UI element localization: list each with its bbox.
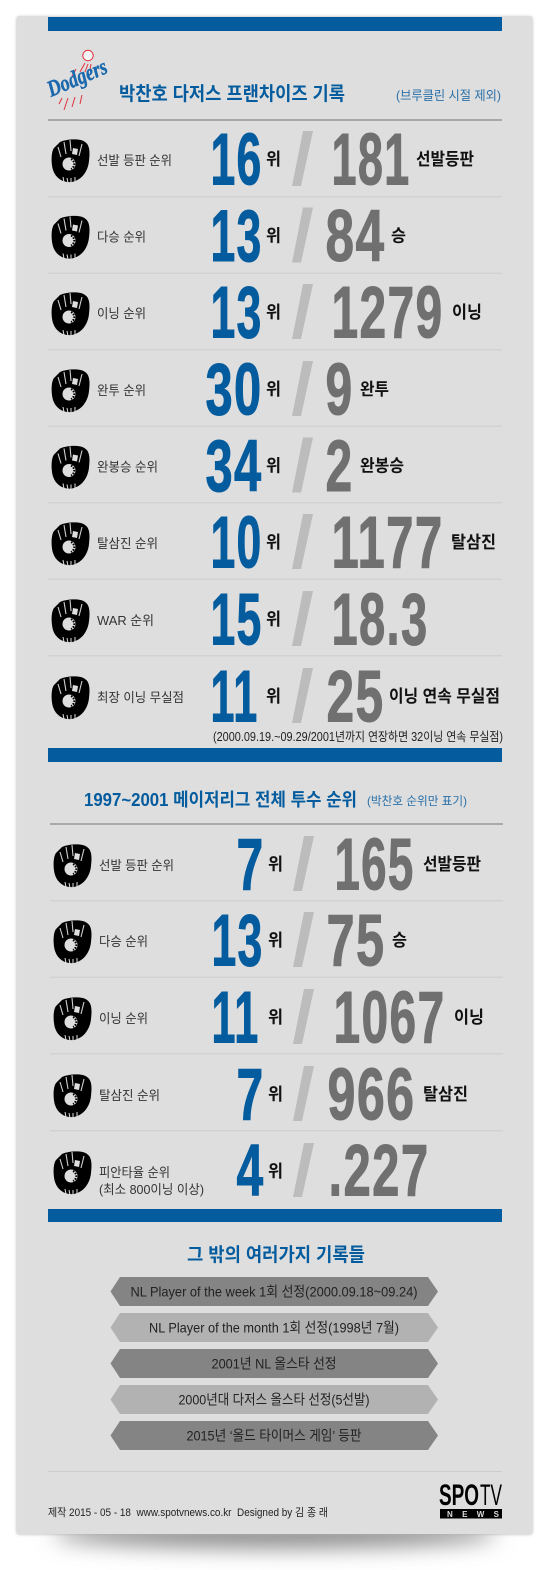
row: innings: 이닝: [452, 303, 482, 322]
middle blue bar: [48, 748, 502, 762]
ribbon: 2001 all-star: [110, 1349, 438, 1378]
ribbon: player of the month: NL Player of the month 1회 선정(1998년 7월): [149, 1320, 399, 1336]
row: starts 1997-2001: 165: [334, 824, 414, 906]
ribbon: old timers game: 2015년 ‘올드 타이머스 게임’ 등판: [186, 1428, 362, 1444]
row: innings: [52, 272, 482, 354]
row: opponent batting average: 4: [236, 1130, 264, 1212]
row: innings 1997-2001: 1067: [334, 978, 446, 1058]
row: innings: 13: [210, 272, 262, 354]
row: wins: 다승 순위: [97, 230, 146, 244]
row: scoreless innings: 위: [266, 687, 281, 706]
row: complete games: 완투 순위: [97, 383, 146, 398]
row: strikeouts: 1177: [332, 502, 444, 584]
ribbon: player of the week: NL Player of the week 1회 선정(2000.09.18~09.24): [130, 1284, 418, 1300]
row: complete games: 위: [266, 380, 281, 399]
row: wins 1997-2001: 위: [268, 931, 283, 950]
row: strikeouts 1997-2001: [54, 1054, 468, 1136]
row: wins 1997-2001: 75: [326, 900, 386, 982]
row: wins 1997-2001: 13: [212, 900, 264, 982]
row: starts: [52, 120, 474, 200]
heading: MLB pitcher rankings 1997-2001: 1997~2001 메이저리그 전체 투수 순위: [84, 790, 357, 810]
row: wins 1997-2001: 승: [392, 931, 407, 950]
row: complete games: [52, 350, 389, 430]
row: complete games: 30: [206, 350, 262, 430]
row: strikeouts 1997-2001: 966: [328, 1054, 416, 1136]
row: strikeouts: 탈삼진 순위: [97, 536, 158, 551]
row: shutouts: 위: [266, 456, 281, 476]
row: WAR: WAR 순위: [97, 613, 154, 628]
row: complete games: 완투: [360, 380, 389, 399]
row: strikeouts: [52, 502, 496, 584]
row: innings: 1279: [332, 272, 444, 354]
row: starts 1997-2001: 선발등판: [423, 855, 481, 874]
row: starts: 선발 등판 순위: [97, 153, 172, 168]
ribbon: 2000s Dodgers all-star: 2000년대 다저스 올스타 선정(5선발): [178, 1392, 370, 1408]
row: scoreless innings: 25: [326, 656, 384, 738]
row: opponent batting average: [54, 1130, 429, 1212]
row: scoreless innings: 최장 이닝 무실점: [97, 690, 184, 705]
row: strikeouts 1997-2001: 탈삼진: [423, 1085, 468, 1104]
row: strikeouts 1997-2001: 탈삼진 순위: [99, 1088, 160, 1103]
row: opponent batting average: 위: [268, 1162, 283, 1181]
row: wins: 13: [210, 196, 262, 277]
row: opponent batting average: (최소 800이닝 이상): [99, 1182, 204, 1197]
ribbon: player of the week: [110, 1277, 438, 1306]
row: starts: 181: [332, 120, 410, 200]
row: WAR: [52, 580, 428, 660]
row: scoreless innings: [52, 656, 500, 738]
row: WAR: 위: [266, 610, 281, 629]
title: franchise records: 박찬호 다저스 프랜차이즈 기록: [119, 83, 345, 105]
row: WAR: 18.3: [332, 580, 428, 660]
row: starts: 위: [266, 150, 281, 169]
row: strikeouts 1997-2001: 위: [268, 1085, 283, 1104]
row: scoreless innings: 이닝 연속 무실점: [389, 687, 500, 706]
row: shutouts: 완봉승 순위: [97, 460, 158, 474]
row: innings 1997-2001: 위: [268, 1008, 283, 1027]
row: starts: 선발등판: [416, 150, 474, 169]
row: opponent batting average: .227: [328, 1130, 430, 1212]
row: opponent batting average: 피안타율 순위: [99, 1165, 170, 1180]
icon: Dodgers logo: Dodgers: [42, 54, 111, 102]
row: shutouts: 34: [206, 426, 262, 507]
row: innings 1997-2001: [54, 978, 484, 1058]
ribbon: old timers game: [110, 1421, 438, 1450]
note: scoreless streak dates: (2000.09.19.~09.29/2001년까지 연장하면 32이닝 연속 무실점): [213, 730, 503, 744]
row: wins: 위: [266, 226, 281, 246]
row: innings 1997-2001: 이닝: [454, 1008, 484, 1027]
note: excluding Brooklyn: (브루클린 시절 제외): [396, 88, 501, 103]
row: strikeouts: 탈삼진: [451, 533, 496, 552]
row: innings: 이닝 순위: [97, 306, 146, 321]
ribbon: 2000s Dodgers all-star: [110, 1385, 438, 1414]
row: wins 1997-2001: [54, 900, 407, 982]
row: wins: 승: [391, 226, 406, 246]
note: only Park's ranks shown: (박찬호 순위만 표기): [367, 793, 467, 808]
row: starts 1997-2001: [54, 824, 481, 906]
row: starts: 16: [210, 120, 262, 200]
row: complete games: 9: [326, 350, 354, 430]
ribbon: 2001 all-star: 2001년 NL 올스타 선정: [212, 1356, 336, 1372]
row: starts 1997-2001: 위: [268, 855, 283, 874]
row: strikeouts 1997-2001: 7: [236, 1054, 264, 1136]
row: wins: [52, 196, 406, 277]
row: starts 1997-2001: 선발 등판 순위: [99, 858, 174, 873]
top blue bar: [48, 17, 502, 31]
lower blue bar: [48, 1209, 502, 1222]
row: shutouts: 2: [326, 426, 354, 507]
logo: SPOTV NEWS: NEWS: [447, 1510, 500, 1519]
footer credits: 제작 2015 - 05 - 18 www.spotvnews.co.kr Designed by 김 종 래: [48, 1506, 328, 1519]
row: wins 1997-2001: 다승 순위: [99, 934, 148, 949]
row: shutouts: 완봉승: [360, 456, 404, 476]
row: WAR: 15: [210, 580, 262, 660]
row: innings: 위: [266, 303, 281, 322]
row: strikeouts: 위: [266, 533, 281, 552]
row: starts 1997-2001: 7: [236, 824, 264, 906]
row: innings 1997-2001: 11: [212, 978, 260, 1058]
row: strikeouts: 10: [210, 502, 262, 584]
logo: SPOTV NEWS: SPO: [439, 1479, 479, 1512]
ribbon: player of the month: [110, 1313, 438, 1342]
icon: Dodgers logo: [42, 50, 111, 110]
logo: SPOTV NEWS: TV: [480, 1479, 502, 1512]
row: scoreless innings: 11: [210, 656, 258, 738]
row: innings 1997-2001: 이닝 순위: [99, 1011, 148, 1026]
row: wins: 84: [326, 196, 386, 277]
heading: other records: 그 밖의 여러가지 기록들: [187, 1244, 365, 1266]
row: shutouts: [52, 426, 404, 507]
